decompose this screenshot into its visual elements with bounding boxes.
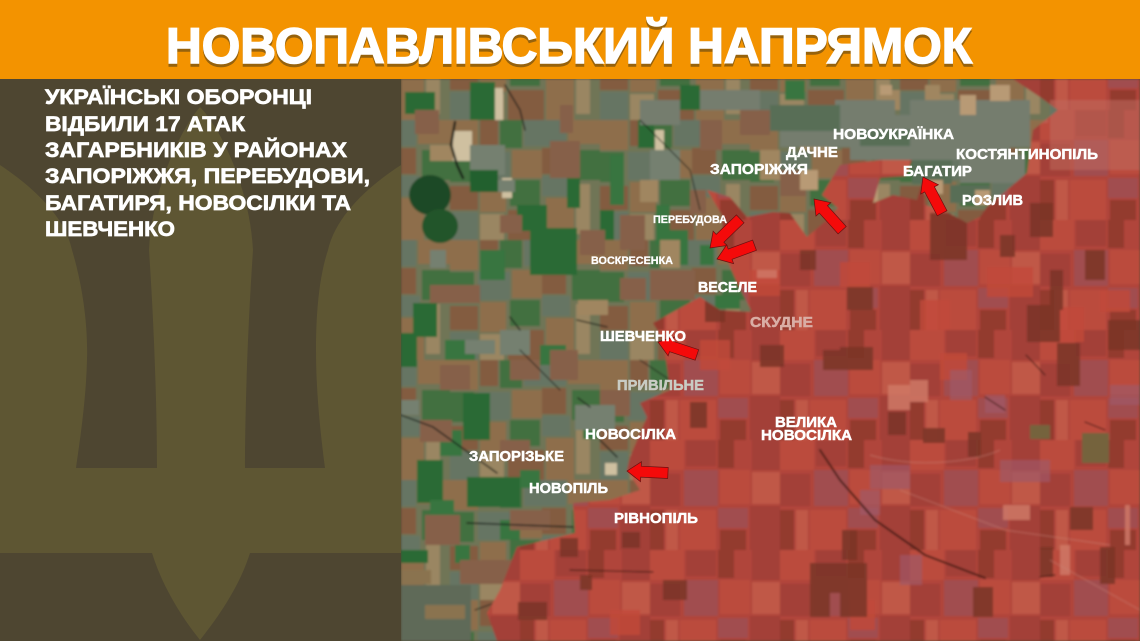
occupied territory: red overlay <box>486 79 1140 641</box>
map labels: settlements: СКУДНЕ <box>750 314 813 331</box>
icon: trident emblem <box>0 107 401 640</box>
map labels: settlements: БАГАТИР <box>903 163 972 180</box>
map labels: settlements: ДАЧНЕ <box>786 144 838 161</box>
panel: left text panel with trident <box>0 79 401 641</box>
text block: summary: УКРАЇНСЬКІ ОБОРОНЦІ <box>45 86 312 109</box>
map labels: settlements: КОСТЯНТИНОПІЛЬ <box>956 146 1098 163</box>
text block: summary: ЗАПОРІЖЖЯ, ПЕРЕБУДОВИ, <box>45 165 370 188</box>
title: НОВОПАВЛІВСЬКИЙ НАПРЯМОК <box>166 17 972 74</box>
map labels: settlements <box>469 126 1098 527</box>
map labels: settlements: НОВОСІЛКА <box>761 427 852 444</box>
map labels: settlements: ПРИВІЛЬНЕ <box>617 377 704 394</box>
text block: summary: ЗАГАРБНИКІВ У РАЙОНАХ <box>45 138 347 162</box>
text block: summary: БАГАТИРЯ, НОВОСІЛКИ ТА <box>45 192 351 215</box>
text block: summary <box>45 86 370 241</box>
map labels: settlements: ЗАПОРІЗЬКЕ <box>469 448 564 465</box>
map labels: settlements: ШЕВЧЕНКО <box>600 328 686 345</box>
arrow: Bahatyr <box>914 172 951 218</box>
map labels: settlements: НОВОСІЛКА <box>585 426 676 443</box>
text block: summary: ВІДБИЛИ 17 АТАК <box>45 113 245 136</box>
map labels: settlements: НОВОПІЛЬ <box>529 480 608 497</box>
map labels: settlements: ВЕСЕЛЕ <box>698 279 757 296</box>
arrow: Vesele <box>714 236 758 268</box>
header bar <box>0 0 1140 79</box>
arrow: Shevchenko <box>655 333 700 364</box>
map labels: settlements: ЗАПОРІЖЖЯ <box>710 161 808 178</box>
map: satellite view <box>401 79 1140 641</box>
map labels: settlements: ВЕЛИКА <box>775 414 837 431</box>
arrow: Perebudova <box>703 212 747 255</box>
map labels: settlements: ПЕРЕБУДОВА <box>653 214 727 226</box>
map labels: settlements: НОВОУКРАЇНКА <box>833 126 954 143</box>
map labels: settlements: РОЗЛИВ <box>962 192 1023 209</box>
arrow: Novosilka <box>627 461 668 483</box>
text block: summary: ШЕВЧЕНКО <box>45 218 175 241</box>
arrow: Zaporizhzhia <box>807 192 850 237</box>
map labels: settlements: ВОСКРЕСЕНКА <box>591 255 673 267</box>
map labels: settlements: РІВНОПІЛЬ <box>614 510 698 527</box>
